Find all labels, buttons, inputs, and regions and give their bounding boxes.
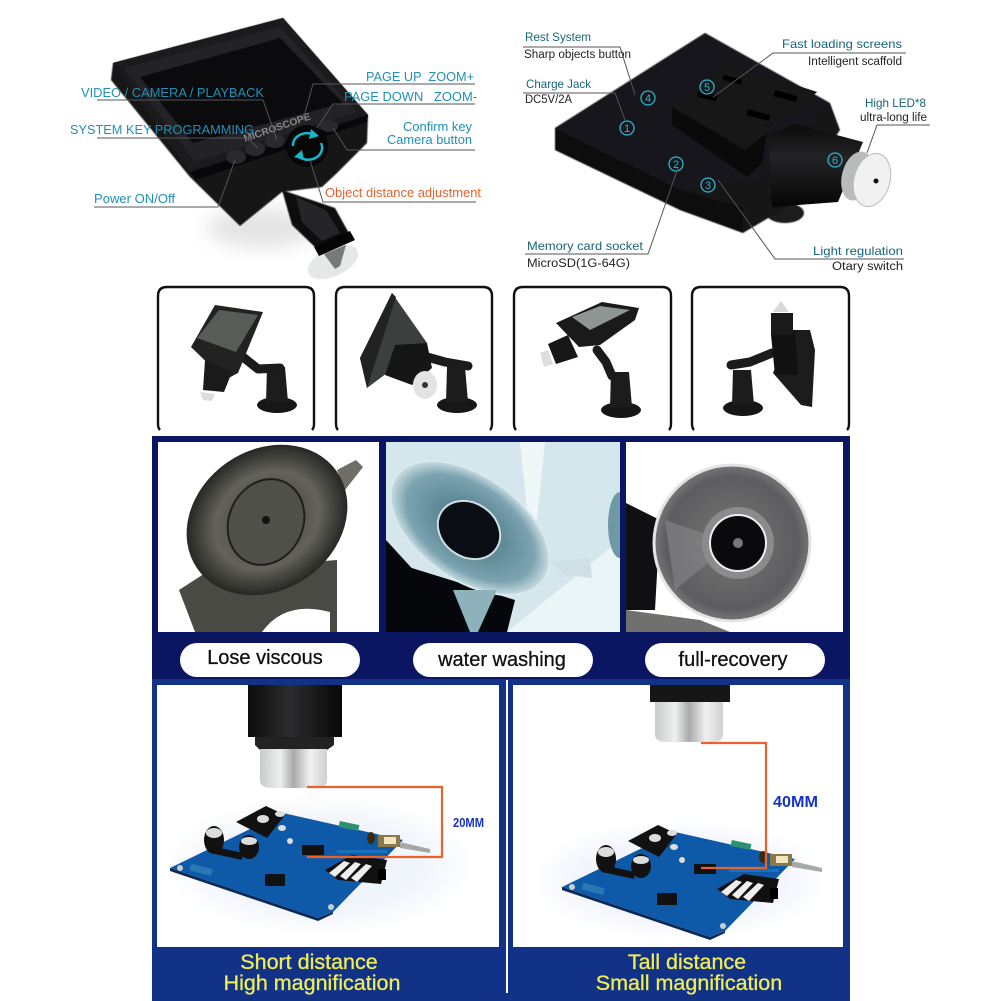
- caption: short distance: Short distance: [240, 950, 378, 974]
- device base: [555, 33, 840, 233]
- photo: tall distance: [513, 685, 843, 947]
- callout: confirm key: Camera button: [387, 132, 472, 147]
- callout: object distance: Object distance adjustment: [325, 185, 481, 200]
- icons: numbered markers: 4: [645, 93, 651, 105]
- device body: [111, 18, 368, 248]
- panel: front device with button callouts: [70, 18, 481, 286]
- icons: numbered markers: 3: [705, 180, 711, 192]
- callout: light regulation: Otary switch: [832, 261, 903, 273]
- callout: charge jack: [523, 77, 625, 120]
- callout: page up: [303, 69, 475, 120]
- icons: numbered markers: 6: [832, 155, 838, 167]
- thumbnail: raised upward: [514, 287, 671, 430]
- icons: numbered markers: 2: [673, 159, 679, 171]
- panel: four stand positions: [158, 287, 849, 430]
- callout: high LED: ultra-long life: [860, 112, 927, 124]
- callout: confirm key: [333, 119, 475, 150]
- lens tube: [768, 124, 896, 211]
- 20MM distance marker: [307, 787, 484, 857]
- photo: water washing: [366, 434, 632, 632]
- lens tube and tip: [282, 190, 363, 286]
- caption: tall distance: Tall distance: [628, 950, 746, 974]
- label: water washing: [413, 643, 593, 677]
- callout: fast loading screens: Intelligent scaffold: [808, 56, 902, 68]
- icon: rotating knob: [286, 125, 328, 167]
- icons: numbered markers: [620, 80, 842, 192]
- callout: system key programming: [70, 122, 258, 148]
- scaffold block: [672, 63, 817, 177]
- callout: memory card socket: Memory card socket: [527, 239, 644, 253]
- callout: high LED: [860, 96, 930, 153]
- callout: power: Power ON/Off: [94, 191, 175, 206]
- microscope buttons and label: [226, 112, 338, 164]
- thumbnail: lens upward: [692, 287, 849, 430]
- panel: rear device with numbered callouts: [523, 30, 930, 273]
- callout: rest system: [523, 30, 635, 95]
- icons: numbered markers: 5: [704, 82, 710, 94]
- caption: short distance: [224, 950, 400, 995]
- callout: confirm key: Confirm key: [403, 119, 472, 134]
- panel: blue background: [152, 414, 850, 1001]
- callout: rest system: Rest System: [525, 30, 591, 44]
- 20MM distance marker: 20MM: [453, 815, 484, 830]
- label: water washing: water washing: [437, 649, 566, 671]
- callout: page up: PAGE UP ZOOM+: [366, 69, 474, 84]
- 40MM distance marker: 40MM: [773, 794, 818, 811]
- callout: rest system: Sharp objects button: [524, 49, 631, 61]
- callout: video camera playback: VIDEO / CAMERA / PLAYBACK: [81, 85, 264, 100]
- callout: system key programming: SYSTEM KEY PROGRAMMING: [70, 122, 254, 137]
- callout: high LED: High LED*8: [865, 96, 926, 110]
- callout: page down: PAGE DOWN ZOOM-: [344, 89, 477, 104]
- photo: short distance: [157, 685, 499, 947]
- caption: short distance: High magnification: [224, 971, 400, 995]
- callout: memory card socket: MicroSD(1G-64G): [527, 258, 630, 270]
- thumbnail: tilted side: [336, 287, 492, 430]
- thumbnail: screen facing front: [158, 287, 314, 430]
- callout: charge jack: Charge Jack: [526, 77, 592, 91]
- label: Lose viscous: Lose viscous: [207, 647, 323, 669]
- callout: charge jack: DC5V/2A: [525, 94, 572, 106]
- callout: light regulation: [718, 180, 904, 273]
- callout: video camera playback: [81, 85, 277, 140]
- photo: recovered suction cup: [626, 442, 843, 632]
- 40MM distance marker: [701, 743, 818, 868]
- microscope buttons and label: MICROSCOPE: [242, 112, 312, 145]
- callout: memory card socket: [525, 168, 678, 270]
- label: Lose viscous: [180, 643, 360, 677]
- label: full-recovery: [645, 643, 825, 677]
- callout: power: [94, 160, 235, 207]
- label: full-recovery: full-recovery: [679, 649, 787, 671]
- callout: page down: [317, 89, 477, 128]
- icons: numbered markers: 1: [624, 123, 630, 135]
- caption: tall distance: Small magnification: [596, 971, 782, 995]
- caption: tall distance: [596, 950, 782, 995]
- callout: light regulation: Light regulation: [813, 244, 903, 258]
- callout: fast loading screens: Fast loading screens: [782, 37, 902, 51]
- callout: object distance: [310, 160, 481, 202]
- photo: dirty suction cup: [157, 414, 379, 632]
- callout: fast loading screens: [713, 37, 906, 97]
